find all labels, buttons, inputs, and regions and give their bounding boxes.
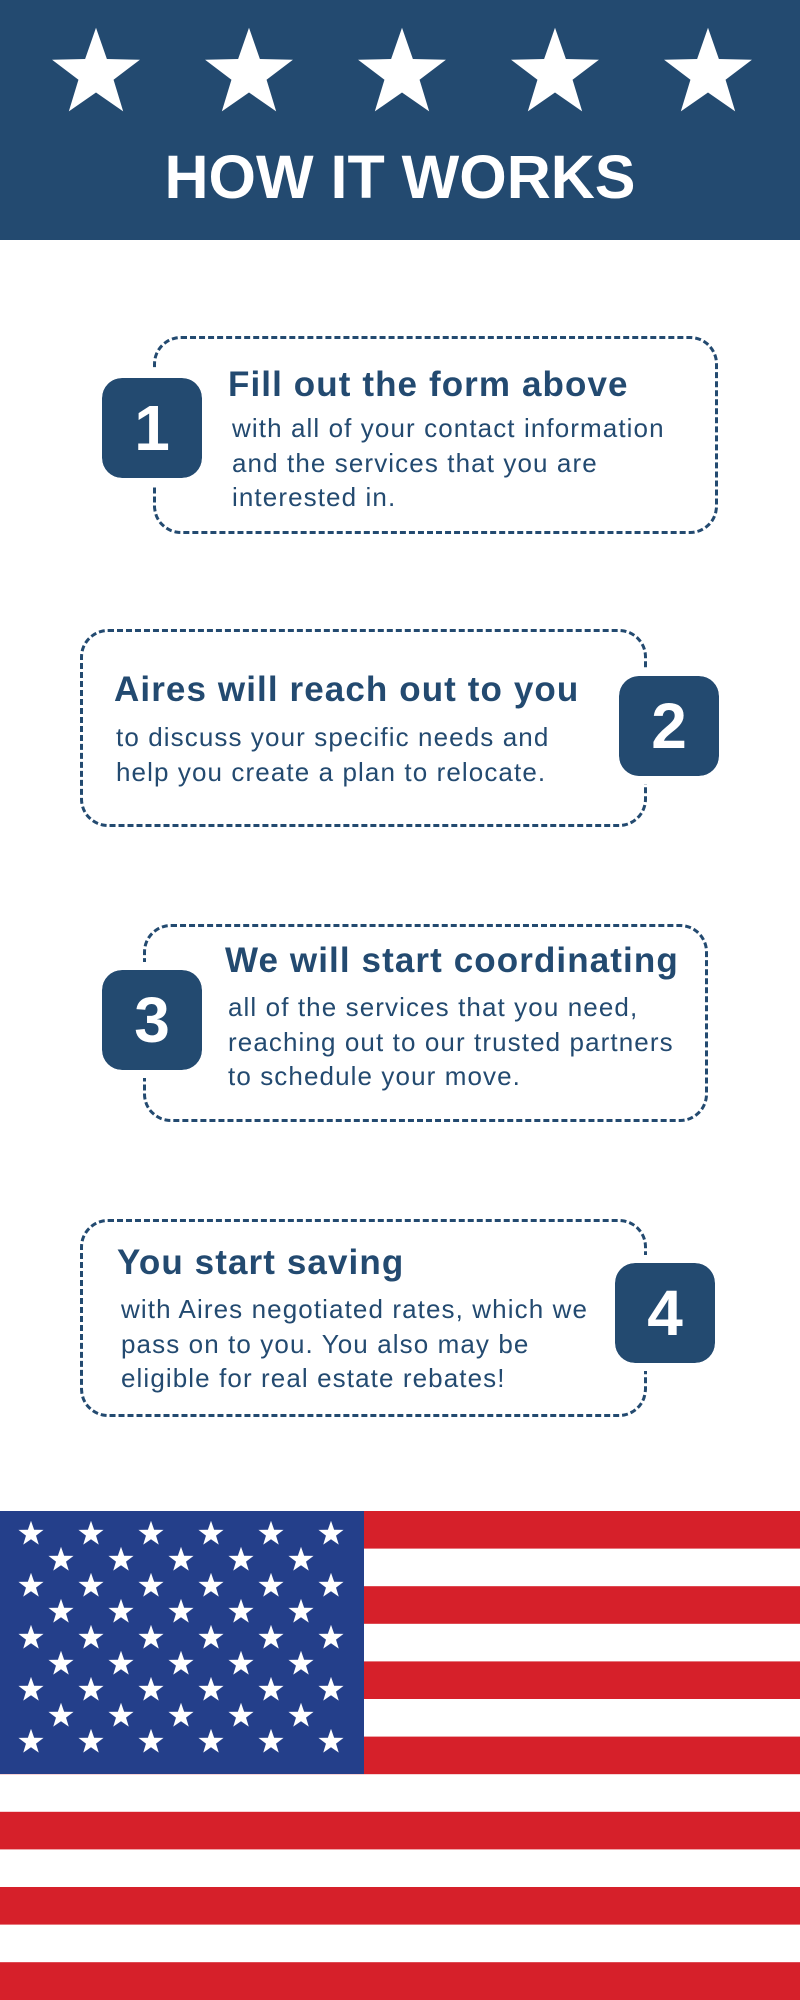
title: HOW IT WORKS (164, 143, 636, 211)
step 3 (102, 924, 708, 1122)
step 1 text (232, 413, 665, 512)
step 2 (80, 629, 719, 827)
step 3 heading: We will start coordinating (225, 941, 679, 980)
step 3 text: reaching out to our trusted partners (228, 1026, 674, 1056)
step 4 heading: You start saving (117, 1243, 404, 1282)
number 1 (102, 378, 202, 478)
step 2 text (116, 722, 549, 786)
step 4 text: with Aires negotiated rates, which we (121, 1294, 588, 1324)
step 2 text: to discuss your specific needs and (116, 722, 549, 752)
step 2 text: help you create a plan to relocate. (116, 756, 546, 786)
step 1 text: with all of your contact information (232, 413, 665, 443)
step 1 (102, 336, 718, 534)
step 2 heading: Aires will reach out to you (114, 670, 579, 709)
step 4 text (121, 1294, 588, 1393)
step 4 text: pass on to you. You also may be (121, 1328, 529, 1358)
number 1: 1 (134, 392, 170, 464)
number 3 (102, 970, 202, 1070)
step 3 text: all of the services that you need, (228, 992, 638, 1022)
number 4: 4 (647, 1277, 683, 1349)
step 1 heading: Fill out the form above (228, 365, 629, 404)
step 3 text: to schedule your move. (228, 1061, 521, 1091)
step 4 text: eligible for real estate rebates! (121, 1363, 506, 1393)
number 2 (619, 676, 719, 776)
american flag (0, 1511, 800, 2000)
step 1 text: interested in. (232, 482, 396, 512)
number 3: 3 (134, 984, 170, 1056)
number 2: 2 (651, 690, 687, 762)
icon: five stars (52, 28, 752, 112)
step 4 (80, 1219, 715, 1417)
header banner (0, 0, 800, 240)
step 3 text (228, 992, 674, 1091)
number 4 (615, 1263, 715, 1363)
step 1 text: and the services that you are (232, 448, 598, 478)
